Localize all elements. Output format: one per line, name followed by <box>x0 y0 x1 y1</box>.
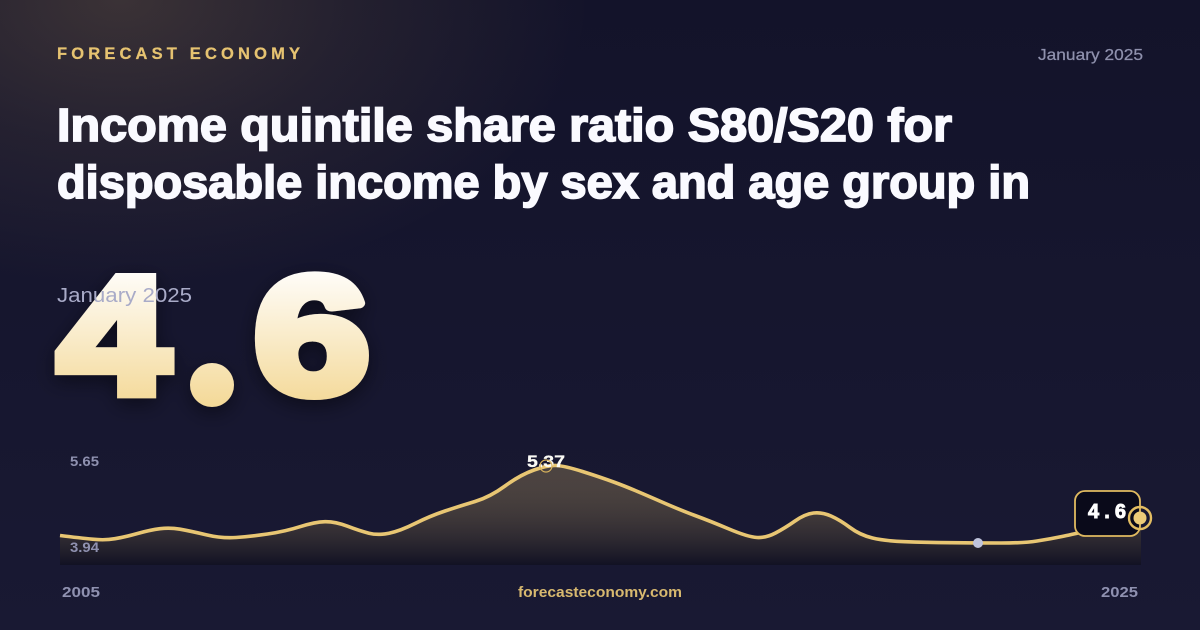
date subtitle: January 2025 <box>57 285 192 307</box>
chart line <box>60 465 1141 543</box>
y-axis min label: 3.94 <box>70 539 99 555</box>
peak marker <box>540 460 552 472</box>
current value callout <box>1075 491 1140 536</box>
title: disposable income by sex and age group in <box>57 156 1030 208</box>
big value 4.6 <box>58 242 370 428</box>
date top right: January 2025 <box>1038 47 1143 64</box>
x-axis start year: 2005 <box>62 585 100 601</box>
peak label: 5.37 <box>527 452 565 471</box>
website footer: forecasteconomy.com <box>518 585 682 601</box>
title: Income quintile share ratio S80/S20 for <box>57 99 952 151</box>
big value 4.6: 4 <box>58 243 169 428</box>
low point marker <box>973 538 983 548</box>
big value 4.6: 6 <box>254 242 370 428</box>
current value callout: 4.6 <box>1088 501 1126 523</box>
title <box>57 99 1030 208</box>
current point marker <box>1129 507 1151 529</box>
chart area fill <box>60 465 1141 565</box>
x-axis end year: 2025 <box>1101 585 1138 601</box>
brand label: FORECAST ECONOMY <box>57 45 300 63</box>
y-axis max label: 5.65 <box>70 453 99 469</box>
chart: sparkline <box>60 452 1151 565</box>
